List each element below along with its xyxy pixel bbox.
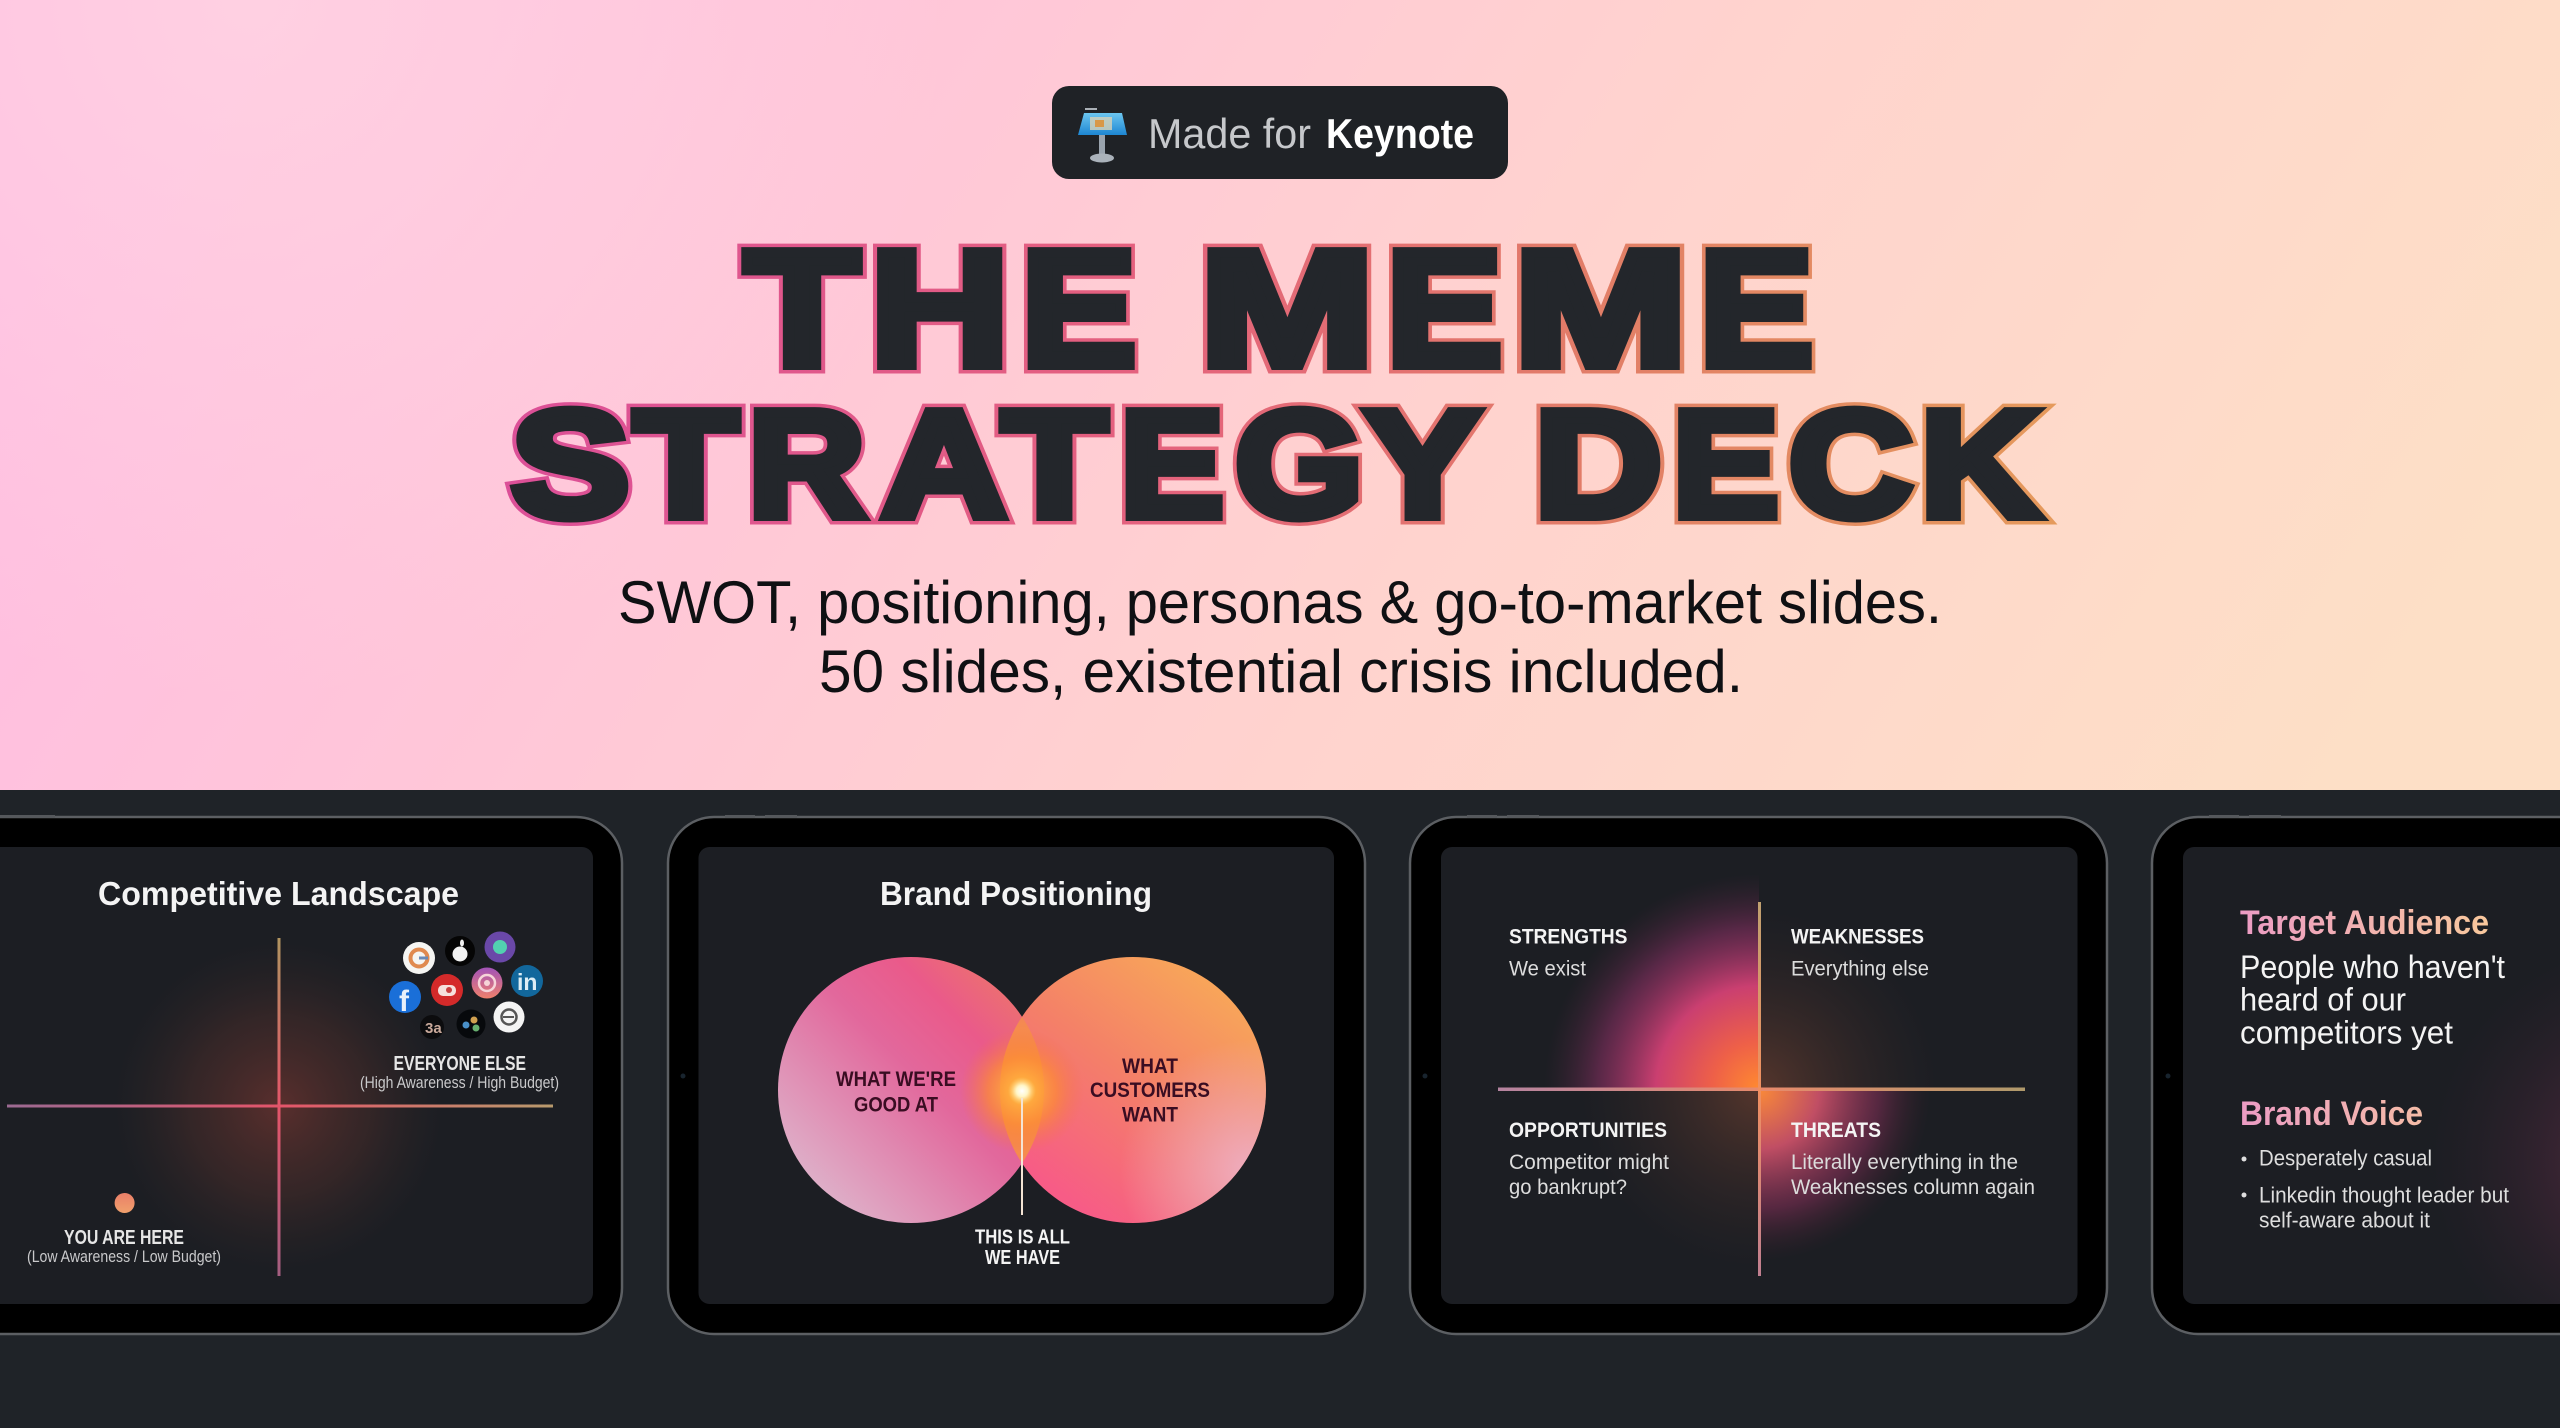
venn diagram [778, 957, 1266, 1223]
competitor logo cluster: f [399, 985, 410, 1018]
icon: Keynote podium [1078, 108, 1127, 162]
slide title: Competitive Landscape [98, 875, 459, 912]
dark device band [0, 790, 2560, 1428]
title: M [1200, 217, 1374, 400]
venn label: right: CUSTOMERS [1090, 1079, 1210, 1102]
title: T [745, 217, 859, 400]
quadrant: strengths: We exist [1509, 958, 1586, 980]
heading: brand voice: Brand Voice [2240, 1095, 2423, 1133]
title: S [511, 379, 629, 548]
venn label: left [836, 1068, 956, 1116]
quadrant axes [1498, 902, 2025, 1276]
title: R [748, 379, 865, 548]
title: E [1386, 217, 1502, 400]
heading: target audience: Target Audience [2240, 904, 2489, 942]
callout: this is all we have [975, 1226, 1070, 1269]
list: brand voice bullets: Desperately casual [2259, 1146, 2432, 1170]
quadrant: strengths: STRENGTHS [1509, 926, 1628, 948]
title: G [1235, 379, 1363, 548]
subtitle [618, 569, 1942, 705]
title: C [1789, 379, 1912, 548]
title: E [1386, 217, 1502, 400]
panel: audience and voice tablet [2152, 815, 2560, 1334]
title: R [748, 379, 865, 548]
title: Y [1365, 379, 1478, 548]
quadrant: threats [1791, 1119, 2035, 1199]
label: everyone else: (High Awareness / High Budget) [360, 1074, 559, 1092]
venn label: right [1090, 1055, 1210, 1126]
title: H [870, 217, 1009, 400]
title: T [745, 217, 859, 400]
title: E [1021, 217, 1136, 400]
label: everyone else [360, 1053, 559, 1092]
quadrant: opportunities: OPPORTUNITIES [1509, 1119, 1667, 1142]
panel: Competitive Landscape tablet [0, 815, 622, 1334]
title: D [1535, 379, 1662, 548]
label: you are here: (Low Awareness / Low Budget) [27, 1248, 221, 1266]
label: you are here [27, 1227, 221, 1266]
text: audience description: competitors yet [2240, 1014, 2453, 1050]
title: E [1673, 379, 1778, 548]
badge text: Made for [1148, 110, 1311, 157]
list: brand voice bullets: Linkedin thought leader but [2259, 1182, 2509, 1208]
title: E [1021, 217, 1136, 400]
callout: this is all we have: WE HAVE [985, 1247, 1060, 1269]
venn label: left: WHAT WE'RE [836, 1068, 956, 1091]
title: E [1699, 217, 1813, 400]
list: brand voice bullets [2242, 1146, 2509, 1232]
title: E [1120, 379, 1224, 548]
venn label: right: WANT [1122, 1104, 1178, 1126]
panel: Brand Positioning tablet [668, 815, 1365, 1334]
text: audience description: heard of our [2240, 982, 2406, 1018]
competitor logo cluster [389, 932, 543, 1039]
quadrant: threats: THREATS [1791, 1119, 1881, 1142]
text: audience description: People who haven't [2240, 949, 2505, 985]
title [511, 217, 2040, 548]
label: everyone else: EVERYONE ELSE [394, 1053, 526, 1075]
venn label: left: GOOD AT [854, 1094, 938, 1116]
quadrant glows [1500, 850, 1989, 1304]
subtitle: SWOT, positioning, personas & go-to-market slides. [618, 569, 1942, 636]
title: K [1921, 379, 2040, 548]
competitor logo cluster: 3a [425, 1020, 442, 1037]
title: K [1921, 379, 2040, 548]
label: you are here: YOU ARE HERE [64, 1227, 184, 1249]
competitor logo cluster: in [517, 969, 537, 995]
title: E [1699, 217, 1813, 400]
title: M [1514, 217, 1687, 400]
venn label: right: WHAT [1122, 1055, 1178, 1078]
title: E [1673, 379, 1778, 548]
quadrant: weaknesses [1791, 926, 1929, 980]
title: E [1120, 379, 1224, 548]
callout: this is all we have: THIS IS ALL [975, 1226, 1070, 1248]
slide title: Brand Positioning [880, 875, 1152, 912]
title: T [1002, 379, 1107, 548]
subtitle: 50 slides, existential crisis included. [819, 638, 1743, 705]
quadrant: opportunities: go bankrupt? [1509, 1176, 1627, 1199]
title: G [1235, 379, 1363, 548]
hero background [0, 0, 2560, 790]
badge: Made for Keynote [1052, 86, 1508, 179]
quadrant: weaknesses: Everything else [1791, 958, 1929, 980]
title: M [1514, 217, 1687, 400]
title: A [882, 379, 1006, 548]
marker: you are here [115, 1193, 135, 1213]
title: T [634, 379, 738, 548]
quadrant: weaknesses: WEAKNESSES [1791, 926, 1924, 948]
title: A [882, 379, 1006, 548]
text: audience description [2240, 949, 2505, 1050]
title: T [634, 379, 738, 548]
title: C [1789, 379, 1912, 548]
title: Y [1365, 379, 1478, 548]
quadrant chart axes [7, 938, 553, 1276]
quadrant: threats: Literally everything in the [1791, 1151, 2018, 1174]
quadrant: threats: Weaknesses column again [1791, 1176, 2035, 1199]
title: H [870, 217, 1009, 400]
panel: SWOT tablet [1410, 815, 2107, 1334]
title: T [1002, 379, 1107, 548]
quadrant: opportunities [1509, 1119, 1669, 1199]
quadrant: strengths [1509, 926, 1628, 980]
badge text: Keynote [1326, 110, 1474, 157]
title: D [1535, 379, 1662, 548]
title: M [1200, 217, 1374, 400]
list: brand voice bullets: self-aware about it [2259, 1208, 2430, 1232]
quadrant: opportunities: Competitor might [1509, 1151, 1669, 1174]
title: S [511, 379, 629, 548]
